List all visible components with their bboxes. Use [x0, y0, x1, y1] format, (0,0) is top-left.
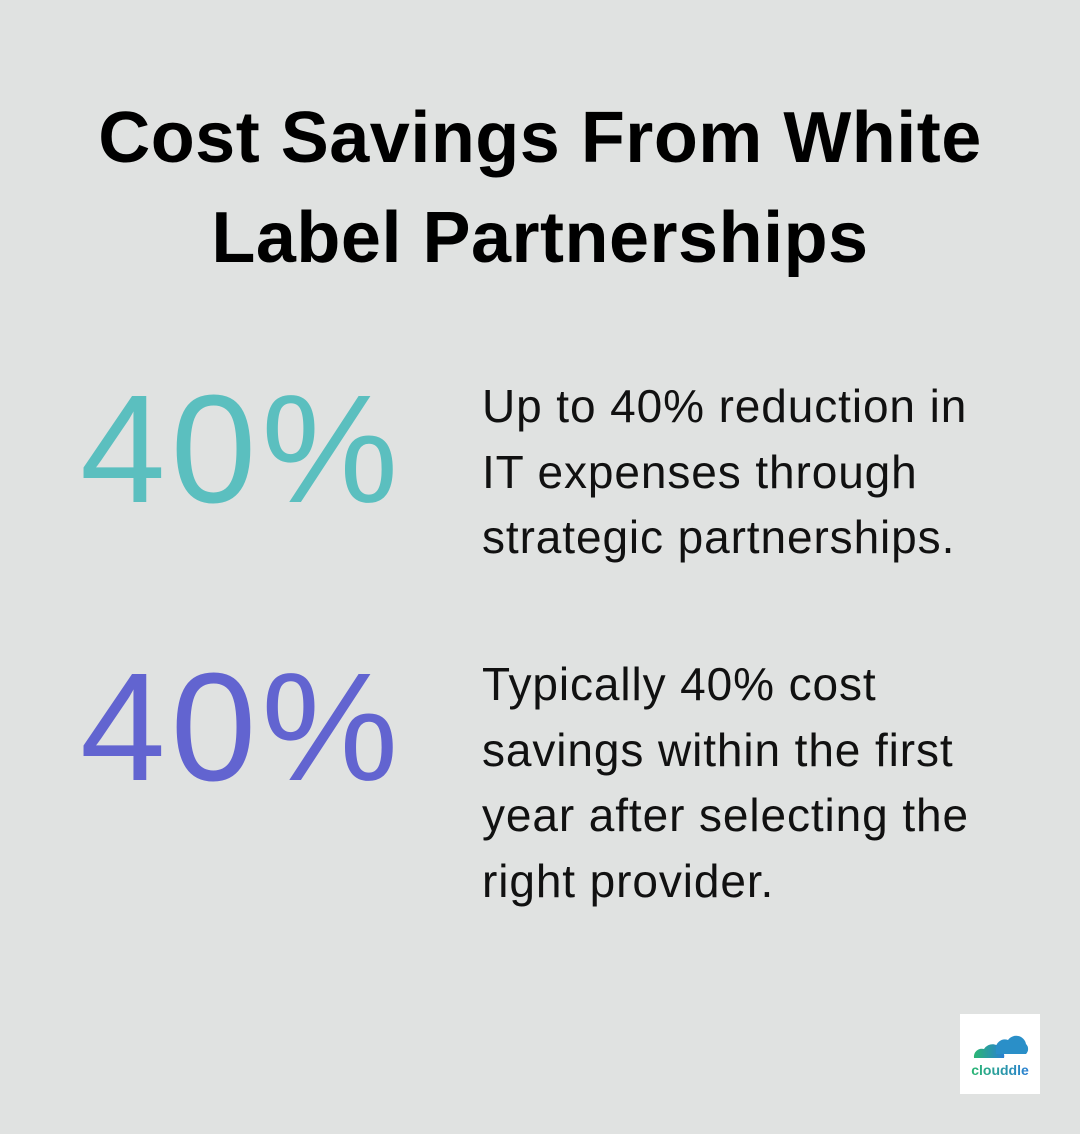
stat 2 number: 40%: [80, 641, 403, 813]
stat 1 description: [482, 380, 967, 563]
stat 1 number: 40%: [80, 363, 403, 535]
stat 2 description: right provider.: [482, 854, 774, 906]
title: Cost Savings From White: [98, 98, 982, 178]
title: [98, 98, 982, 278]
stat 2 description: year after selecting the: [482, 789, 969, 841]
logo: [960, 1014, 1040, 1094]
stat 1 description: strategic partnerships.: [482, 511, 955, 563]
title: Label Partnerships: [211, 198, 869, 278]
stat 2 description: Typically 40% cost: [482, 658, 877, 710]
stat 1 description: IT expenses through: [482, 446, 918, 498]
stat 2 description: [482, 658, 969, 906]
stat 1 description: Up to 40% reduction in: [482, 380, 967, 432]
logo: clouddle: [971, 1062, 1029, 1078]
stat 2 description: savings within the first: [482, 724, 954, 776]
